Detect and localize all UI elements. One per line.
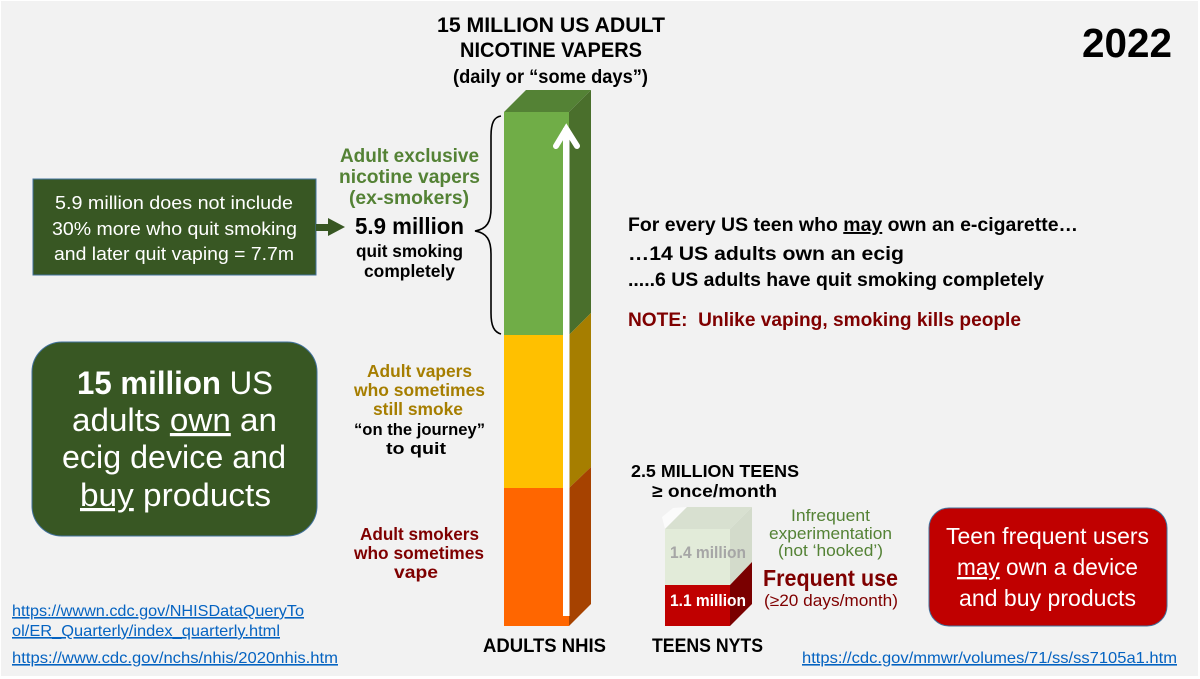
top face <box>665 507 752 529</box>
label: adult smokers who sometimes vape: vape <box>394 562 438 582</box>
white corner highlight <box>662 507 687 529</box>
panel: 15 million US adults own an ecig: 15 million US <box>77 365 273 401</box>
heading: 2.5 million teens <box>631 461 799 501</box>
callout: 5.9 million does not include: and later quit vaping = 7.7m <box>54 244 294 264</box>
frequent segment: 1.1 million <box>670 592 746 610</box>
label: infrequent experimentation: (not ‘hooked’) <box>778 542 883 560</box>
label: adult smokers who sometimes vape: who sometimes <box>353 543 484 563</box>
label: adult vapers who sometimes still smoke <box>353 361 485 458</box>
year label: 2022 <box>1082 20 1172 66</box>
title: 15 million US adult nicotine vapers: NICOTINE VAPERS <box>460 38 642 62</box>
source links: NHIS: https://www.cdc.gov/nchs/nhis/2020nhis.htm <box>12 650 338 667</box>
note: unlike vaping smoking kills people: NOTE: Unlike vaping, smoking kills people <box>628 309 1021 331</box>
label: adult vapers who sometimes still smoke: to quit <box>386 440 447 458</box>
top face <box>504 90 591 112</box>
panel: 15 million US adults own an ecig: buy products <box>80 477 271 513</box>
text: For every US teen comparison: .....6 US adults have quit smoking completely <box>628 269 1044 291</box>
title: 15 million US adult nicotine vapers <box>437 13 665 88</box>
label: 5.9 million quit smoking completely: completely <box>364 261 455 281</box>
panel: teen frequent users <box>929 508 1167 626</box>
label: 5.9 million quit smoking completely: quit smoking <box>356 241 463 261</box>
panel: teen frequent users: may own a device <box>957 554 1138 580</box>
label: adult exclusive nicotine vapers: Adult exclusive <box>340 145 479 167</box>
panel: teen frequent users: Teen frequent users <box>946 523 1149 549</box>
label: 5.9 million quit smoking completely: 5.9 million <box>355 213 464 239</box>
callout: 5.9 million does not include: 5.9 million does not include <box>55 193 293 213</box>
title: 15 million US adult nicotine vapers: 15 MILLION US ADULT <box>437 13 665 37</box>
title: 15 million US adult nicotine vapers: (daily or “some days”) <box>453 66 648 88</box>
label: adult vapers who sometimes still smoke: “on the journey” <box>354 421 485 439</box>
orange segment: smokers who sometimes vape <box>504 467 591 626</box>
callout: 5.9 million does not include <box>33 179 316 275</box>
axis label: adults NHIS: ADULTS NHIS <box>483 635 606 657</box>
source link: MMWR: https://cdc.gov/mmwr/volumes/71/ss/ss7105a1.htm <box>802 650 1177 667</box>
panel: 15 million US adults own an ecig <box>32 342 317 536</box>
panel: 15 million US adults own an ecig: adults own an <box>72 402 277 438</box>
source links: NHIS <box>12 603 338 667</box>
text: For every US teen comparison <box>628 214 1078 291</box>
label: adult exclusive nicotine vapers: (ex-smokers) <box>349 187 469 209</box>
label: frequent use: Frequent use <box>763 565 898 591</box>
label: adult exclusive nicotine vapers: nicotine vapers <box>339 166 480 188</box>
source links: NHIS: https://wwwn.cdc.gov/NHISDataQueryTo <box>12 603 304 620</box>
heading: 2.5 million teens: 2.5 MILLION TEENS <box>631 461 799 481</box>
label: frequent use <box>763 565 898 610</box>
heading: 2.5 million teens: ≥ once/month <box>652 481 777 501</box>
source links: NHIS: ol/ER_Quarterly/index_quarterly.html <box>12 623 280 640</box>
infrequent segment: 1.4 million <box>670 544 746 562</box>
arrow: upward white arrow <box>556 128 577 616</box>
text: For every US teen comparison: …14 US adults own an ecig <box>628 243 904 265</box>
label: adult smokers who sometimes vape: Adult smokers <box>360 524 479 544</box>
label: adult smokers who sometimes vape <box>353 524 484 582</box>
label: adult vapers who sometimes still smoke: Adult vapers <box>367 361 472 381</box>
chart: adults NHIS 3D stacked bar <box>504 90 591 626</box>
panel: teen frequent users: and buy products <box>959 585 1136 611</box>
brace: exclusive vapers segment <box>475 116 501 334</box>
label: adult exclusive nicotine vapers <box>339 145 480 209</box>
label: adult vapers who sometimes still smoke: who sometimes <box>353 380 485 400</box>
text: For every US teen comparison: For every US teen who may own an e-cigarette… <box>628 214 1078 236</box>
green segment: exclusive vapers <box>504 90 591 335</box>
axis label: teens NYTS: TEENS NYTS <box>652 635 763 657</box>
panel: 15 million US adults own an ecig: ecig device and <box>62 439 286 475</box>
label: infrequent experimentation: experimentation <box>769 525 892 543</box>
label: frequent use: (≥20 days/month) <box>764 592 898 610</box>
chart: teens NYTS 3D stacked bar <box>662 507 752 626</box>
label: adult vapers who sometimes still smoke: still smoke <box>373 399 463 419</box>
label: infrequent experimentation: Infrequent <box>791 507 870 525</box>
callout: 5.9 million does not include: 30% more who quit smoking <box>52 219 297 239</box>
label: 5.9 million quit smoking completely <box>355 213 464 281</box>
yellow segment: dual users on the journey <box>504 313 591 488</box>
arrow: callout to 5.9 million <box>316 218 345 236</box>
label: infrequent experimentation <box>769 507 892 560</box>
